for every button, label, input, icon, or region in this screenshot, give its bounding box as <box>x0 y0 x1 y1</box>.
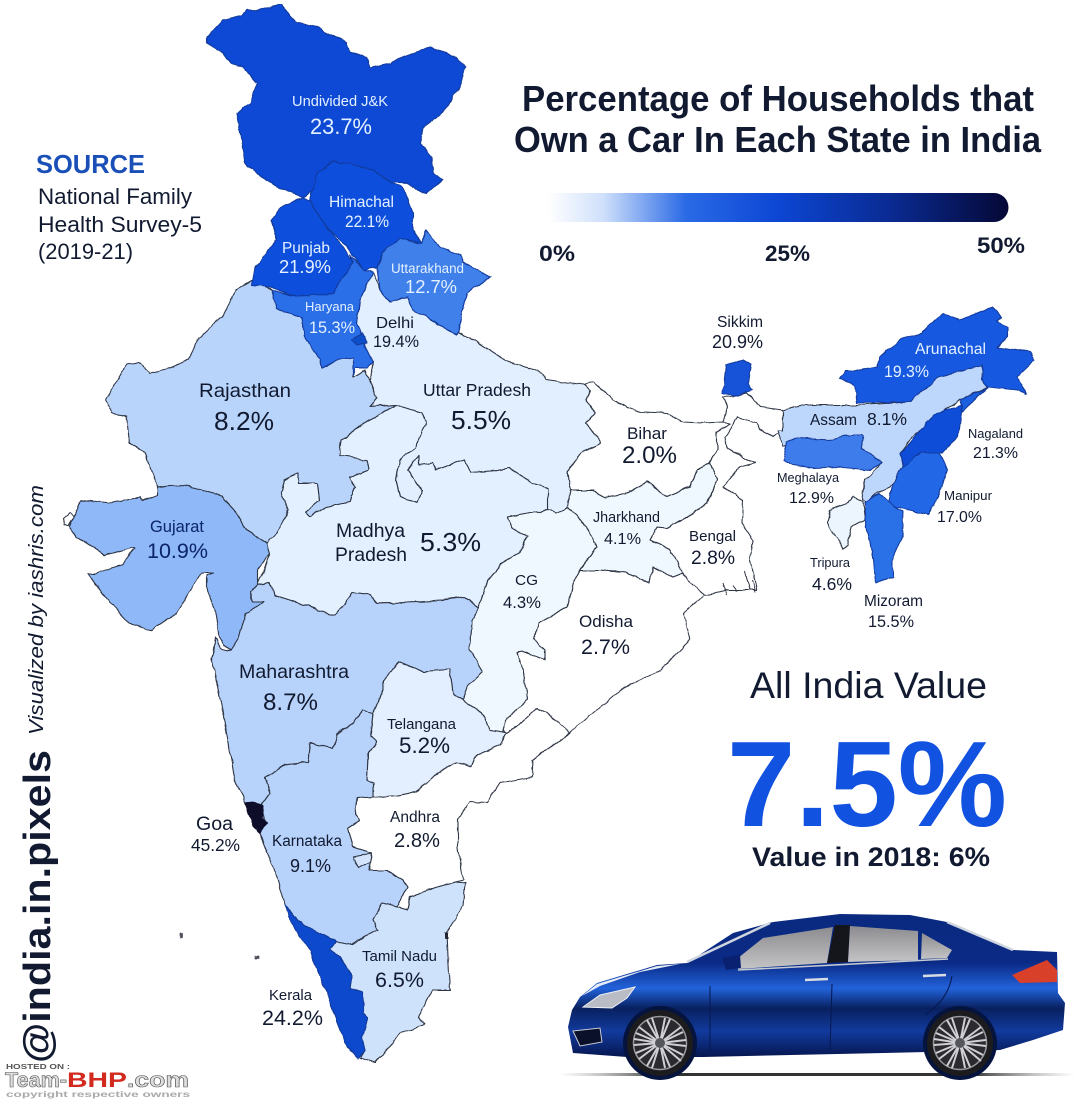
label: Punjab: Punjab <box>282 240 330 257</box>
state: Jharkhand <box>567 463 717 583</box>
label: Jharkhand <box>593 510 660 548</box>
label: Andhra <box>390 809 440 852</box>
islands: Lakshadweep <box>180 933 258 959</box>
scale labels <box>539 233 1025 266</box>
credit: visualized by: Visualized by iashris.com <box>26 485 48 735</box>
label: Kerala: 24.2% <box>262 1006 323 1030</box>
label: Arunachal: 19.3% <box>884 363 929 381</box>
source text <box>38 184 202 264</box>
source text: National Family <box>38 184 193 209</box>
label: Odisha: Odisha <box>579 612 634 631</box>
state: Andhra Pradesh <box>348 708 570 910</box>
state: Rajasthan <box>105 280 396 543</box>
side windows <box>738 925 952 969</box>
label: Bihar: Bihar <box>627 424 667 443</box>
label: Uttar Pradesh: 5.5% <box>451 405 511 435</box>
label: Rajasthan: Rajasthan <box>199 380 291 402</box>
roof chrome <box>687 922 1013 962</box>
state: Maharashtra <box>212 583 483 807</box>
label: Madhya Pradesh: Pradesh <box>335 544 407 566</box>
label: Andhra: 2.8% <box>394 830 440 852</box>
label: Jharkhand: Jharkhand <box>593 510 660 526</box>
label: Haryana <box>305 299 355 337</box>
label: Mizoram: 15.5% <box>868 613 914 631</box>
label: Karnataka <box>272 833 342 876</box>
island: Kutch coast <box>63 512 75 526</box>
label: Haryana: Haryana <box>305 299 355 314</box>
watermark: Team-BHP: BHP <box>67 1069 127 1092</box>
state: Gujarat <box>70 485 270 650</box>
label: Bihar <box>622 424 677 469</box>
comparison value: Value in 2018: 6% <box>752 842 990 872</box>
label: Nagaland: Nagaland <box>968 426 1023 441</box>
watermark: Team-BHP: HOSTED ON : <box>6 1062 70 1071</box>
label: Sikkim: 20.9% <box>712 332 763 352</box>
label: Karnataka: Karnataka <box>272 833 342 850</box>
label: Himachal: 22.1% <box>345 212 389 231</box>
car body <box>568 914 1065 1057</box>
state: Mizoram <box>865 493 903 583</box>
source block <box>36 149 202 264</box>
state: Haryana <box>272 255 374 375</box>
state: Kerala <box>285 905 368 1058</box>
label: Bengal: 2.8% <box>691 548 735 569</box>
headlight <box>583 987 635 1008</box>
callout heading: All India Value <box>750 665 987 706</box>
state: Uttarakhand <box>377 230 490 335</box>
label: Uttar Pradesh: Uttar Pradesh <box>423 380 531 400</box>
rear wheel arch <box>923 1006 997 1080</box>
state: Jammu and Kashmir <box>207 4 466 197</box>
state: Manipur <box>888 453 947 515</box>
label: Undivided J&K: 23.7% <box>310 114 372 139</box>
label: Meghalaya <box>777 471 840 507</box>
state: Nagaland <box>900 405 962 467</box>
label: Uttarakhand: 12.7% <box>405 276 457 297</box>
label: Bengal <box>689 528 736 569</box>
label: Rajasthan: 8.2% <box>214 406 274 436</box>
label: Haryana: 15.3% <box>309 319 355 337</box>
label: CG: CG <box>515 572 538 589</box>
car illustration <box>560 914 1075 1080</box>
label: Delhi <box>373 315 419 351</box>
state: Tamil Nadu <box>330 882 465 1063</box>
state: Himachal Pradesh <box>310 162 422 270</box>
window trim <box>738 959 948 970</box>
label: Madhya Pradesh: 5.3% <box>420 527 481 557</box>
state: Arunachal Pradesh <box>840 307 1035 403</box>
label: Rajasthan <box>199 380 291 436</box>
gradient bar <box>548 193 1009 222</box>
label: Telangana <box>387 717 457 758</box>
label: Gujarat: Gujarat <box>150 518 204 536</box>
territory: Delhi <box>351 333 367 345</box>
label: Maharashtra: 8.7% <box>263 689 318 716</box>
label: Goa <box>191 813 240 855</box>
watermark: Team-BHP: .com <box>127 1069 189 1092</box>
label: Jharkhand: 4.1% <box>604 531 641 548</box>
label: Tripura: 4.6% <box>812 574 852 594</box>
label: Bihar: 2.0% <box>622 442 677 469</box>
hood highlight <box>582 964 680 996</box>
state: Karnataka <box>260 710 407 945</box>
state: Assam <box>778 365 988 503</box>
label: Arunachal <box>884 341 986 381</box>
state: Tripura <box>827 497 865 548</box>
label: Uttarakhand <box>391 261 464 297</box>
state: Goa <box>245 802 267 833</box>
label: Karnataka: 9.1% <box>290 856 331 876</box>
label: Uttarakhand: Uttarakhand <box>391 261 464 276</box>
label: Sikkim: Sikkim <box>717 314 763 331</box>
rear wheel <box>927 1010 993 1076</box>
label: Nagaland: 21.3% <box>973 445 1018 462</box>
tail light <box>1012 960 1057 983</box>
label: Meghalaya: Meghalaya <box>777 471 840 485</box>
territory: Puducherry <box>445 932 449 939</box>
enclave: Bengaluru boundary <box>353 853 372 868</box>
label: Tamil Nadu: 6.5% <box>375 968 424 992</box>
label: Maharashtra: Maharashtra <box>239 661 349 683</box>
label: Manipur: Manipur <box>944 488 993 503</box>
state: Telangana <box>367 662 507 797</box>
label: CG: 4.3% <box>503 593 541 612</box>
colour scale legend <box>539 193 1025 266</box>
labels on dark blue states <box>279 94 986 381</box>
label: Mizoram: Mizoram <box>864 593 923 610</box>
source text: (2019-21) <box>38 239 133 264</box>
label: Madhya Pradesh: Madhya <box>336 520 405 542</box>
label: Kerala <box>262 988 323 1030</box>
label: Mizoram <box>864 593 923 631</box>
state: Punjab <box>252 197 353 297</box>
label: Arunachal: Arunachal <box>915 341 986 358</box>
big number: 7.5% <box>727 716 1007 852</box>
label: Assam: 8.1% <box>867 409 907 429</box>
state: Meghalaya <box>783 435 882 470</box>
label: Madhya Pradesh <box>335 520 481 566</box>
label: Telangana: Telangana <box>387 717 457 733</box>
title <box>514 78 1042 160</box>
label: Gujarat: 10.9% <box>147 539 208 563</box>
source text: Health Survey-5 <box>38 212 202 237</box>
mirror <box>722 955 741 970</box>
label: Assam <box>810 409 907 429</box>
source heading: SOURCE <box>36 149 145 179</box>
coast: Sundarbans <box>723 572 756 595</box>
watermark: Team-BHP: Team- <box>5 1069 67 1092</box>
front bumper grille <box>573 1028 602 1046</box>
label: Tamil Nadu <box>362 949 437 992</box>
label: Assam: Assam <box>810 412 857 429</box>
watermark: Team-BHP: copyright respective owners <box>6 1090 191 1099</box>
label: Kerala: Kerala <box>269 988 313 1004</box>
scale labels: 25% <box>765 241 810 266</box>
state: West Bengal <box>650 393 783 595</box>
label: Undivided J&K: Undivided J&K <box>292 94 388 110</box>
label: Himachal <box>329 194 394 231</box>
label: CG <box>503 572 541 612</box>
state: Madhya Pradesh <box>257 405 548 615</box>
label: Himachal: Himachal <box>329 194 394 211</box>
door lines and handles <box>710 976 952 1052</box>
label: Maharashtra <box>239 661 349 716</box>
label: Goa: Goa <box>196 813 233 835</box>
credit: handle: @india.in.pixels <box>17 750 59 1063</box>
label: Punjab <box>279 240 331 277</box>
title: Own a Car In Each State in India <box>514 119 1042 160</box>
watermark: Team-BHP <box>5 1062 191 1099</box>
label: Undivided J&K <box>292 94 388 139</box>
label: Tripura <box>810 556 852 594</box>
label: Odisha <box>579 612 634 659</box>
state: Chhattisgarh <box>463 507 597 732</box>
label: Delhi: Delhi <box>376 315 414 332</box>
all India value callout <box>727 665 1007 872</box>
label: Nagaland <box>968 426 1023 462</box>
scale labels: 50% <box>977 233 1025 258</box>
scale labels: 0% <box>539 241 575 266</box>
label: Manipur <box>937 488 993 526</box>
label: Goa: 45.2% <box>191 835 240 855</box>
label: Manipur: 17.0% <box>937 509 982 526</box>
state: Odisha <box>503 567 705 733</box>
label: Punjab: 21.9% <box>279 256 331 277</box>
front wheel <box>627 1010 693 1076</box>
label: Meghalaya: 12.9% <box>789 490 834 507</box>
label: Andhra: Andhra <box>390 809 440 826</box>
label: Bengal: Bengal <box>689 528 736 545</box>
strip: north Nagaland edge <box>960 388 988 412</box>
wheel arches <box>623 1006 697 1080</box>
ground shadow <box>560 1073 1075 1076</box>
label: Tripura: Tripura <box>810 556 850 570</box>
label: Delhi: 19.4% <box>373 333 419 351</box>
label: Odisha: 2.7% <box>581 635 630 659</box>
state: Sikkim <box>723 360 752 396</box>
label: Uttar Pradesh <box>423 380 531 435</box>
label: Gujarat <box>147 518 208 563</box>
state: Bihar <box>567 382 730 498</box>
state: Uttar Pradesh <box>357 272 601 513</box>
title: Percentage of Households that <box>522 78 1034 119</box>
label: Telangana: 5.2% <box>399 733 450 758</box>
label: Tamil Nadu: Tamil Nadu <box>362 949 437 965</box>
labels on light states <box>147 314 1023 1030</box>
label: Sikkim <box>712 314 763 352</box>
